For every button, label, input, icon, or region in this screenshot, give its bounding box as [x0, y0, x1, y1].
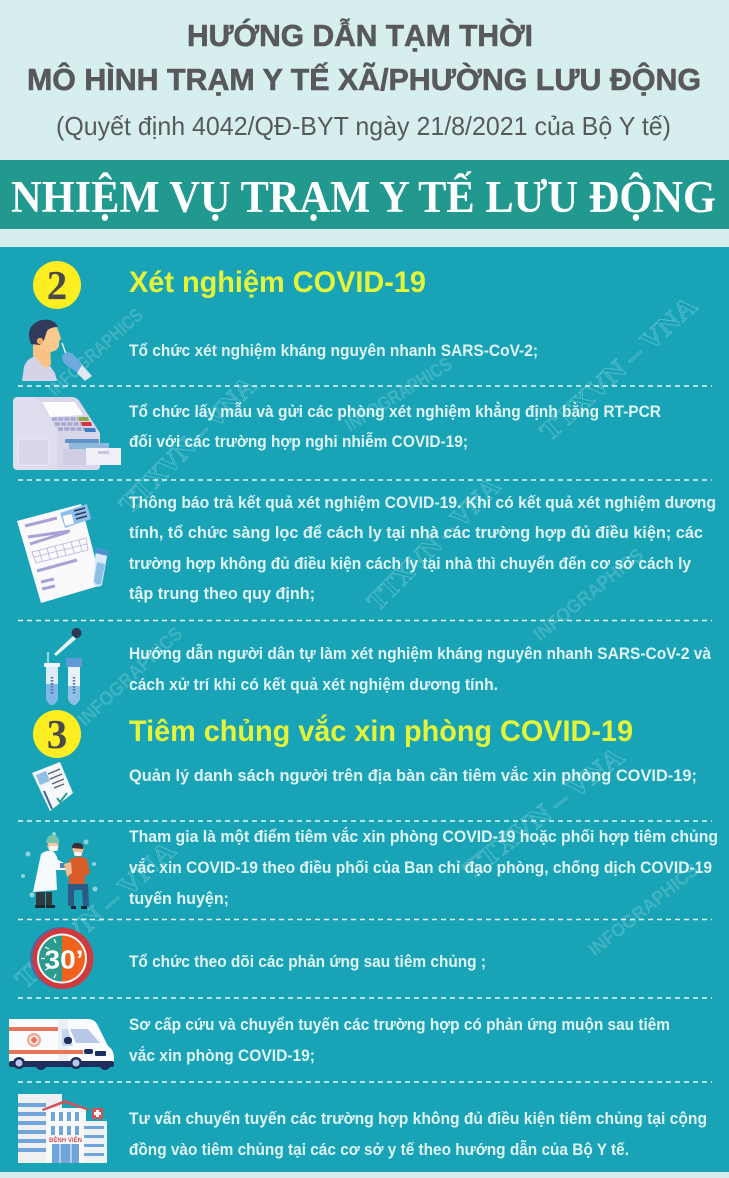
panel: tasks: INFOGRAPHICS: [342, 354, 456, 436]
icon: dropper and test tubes: [44, 628, 82, 705]
text: RT-PCR sampling: [129, 402, 661, 451]
text: RT-PCR sampling: Tổ chức lấy mẫu và gửi các phòng xét nghiệm khẳng định bằng RT-PCR: [129, 402, 661, 421]
text: results notice: trường hợp không đủ điều kiện cách ly tại nhà thì chuyển đến cơ sở cách ly: [129, 554, 691, 573]
number badge 3: 3: [47, 711, 67, 757]
text: self-testing guidance: cách xử trí khi có kết quả xét nghiệm dương tính.: [129, 675, 498, 694]
panel: tasks: INFOGRAPHICS: [585, 860, 703, 961]
panel: tasks: TTXVN – VNA: [534, 290, 703, 446]
text: first aid and referral: Sơ cấp cứu và chuyển tuyến các trường hợp có phản ứng muộn sau tiêm: [129, 1015, 670, 1034]
icon: doctor vaccinating patient: [21, 832, 98, 909]
icon: vaccination list: [32, 762, 73, 811]
title: MÔ HÌNH TRẠM Y TẾ XÃ/PHƯỜNG LƯU ĐỘNG: [27, 61, 701, 97]
title: [27, 17, 701, 97]
text: swab test: Tổ chức xét nghiệm kháng nguyên nhanh SARS-CoV-2;: [129, 341, 538, 360]
dashed dividers: [18, 386, 712, 1082]
heading: section 3: Tiêm chủng vắc xin phòng COVID-19: [129, 714, 633, 748]
text: vaccination site: tuyến huyện;: [129, 889, 229, 908]
subtitle: (Quyết định 4042/QĐ-BYT ngày 21/8/2021 của Bộ Y tế): [56, 111, 671, 141]
number badge 2: 2: [47, 262, 67, 308]
text: vaccination site: [129, 827, 718, 908]
icon: hospital: [18, 1094, 107, 1163]
number badge 3: [33, 710, 81, 758]
text: self-testing guidance: [129, 644, 711, 694]
text: results notice: tập trung theo quy định;: [129, 584, 315, 603]
icon: hospital: BỆNH VIỆN: [49, 1136, 82, 1144]
text: RT-PCR sampling: đối với các trường hợp nghi nhiễm COVID-19;: [129, 432, 468, 451]
icon: lab analyser: [13, 397, 121, 470]
icon: 30 minute clock: [30, 927, 94, 989]
heading: section 2: Xét nghiệm COVID-19: [129, 266, 426, 299]
panel: tasks: TTXVN – VNA: [457, 741, 630, 885]
panel: tasks: INFOGRAPHICS: [44, 305, 148, 401]
icon: test report and tube: [17, 504, 109, 603]
panel: tasks: INFOGRAPHICS: [530, 545, 648, 646]
panel: tasks: TTXVN – VNA: [361, 471, 506, 616]
icon: 30 minute clock: 30’: [44, 944, 84, 974]
panel: tasks: INFOGRAPHICS: [74, 623, 187, 731]
text: referral advice: [129, 1109, 707, 1159]
title: HƯỚNG DẪN TẠM THỜI: [187, 17, 533, 53]
text: results notice: [129, 493, 716, 603]
icon: ambulance: [9, 1019, 114, 1070]
text: first aid and referral: [129, 1015, 670, 1065]
icon: nasal swab person: [22, 320, 92, 381]
panel: tasks: TTXVN – VNA: [113, 370, 262, 519]
text: first aid and referral: vắc xin phòng COVID-19;: [129, 1046, 315, 1065]
panel: tasks: [0, 247, 729, 1172]
text: referral advice: đồng vào tiêm chủng tại các cơ sở y tế theo hướng dẫn của Bộ Y tế.: [129, 1140, 629, 1159]
text: results notice: tính, tổ chức sàng lọc để cách ly tại nhà các trường hợp đủ điều kiện; các: [129, 523, 703, 542]
text: vaccination list: Quản lý danh sách người trên địa bàn cần tiêm vắc xin phòng COVID-19;: [129, 766, 697, 785]
text: post-injection monitoring: Tổ chức theo dõi các phản ứng sau tiêm chủng ;: [129, 952, 486, 971]
number badge 2: [33, 261, 81, 309]
panel: tasks: TTXVN – VNA: [9, 835, 182, 994]
